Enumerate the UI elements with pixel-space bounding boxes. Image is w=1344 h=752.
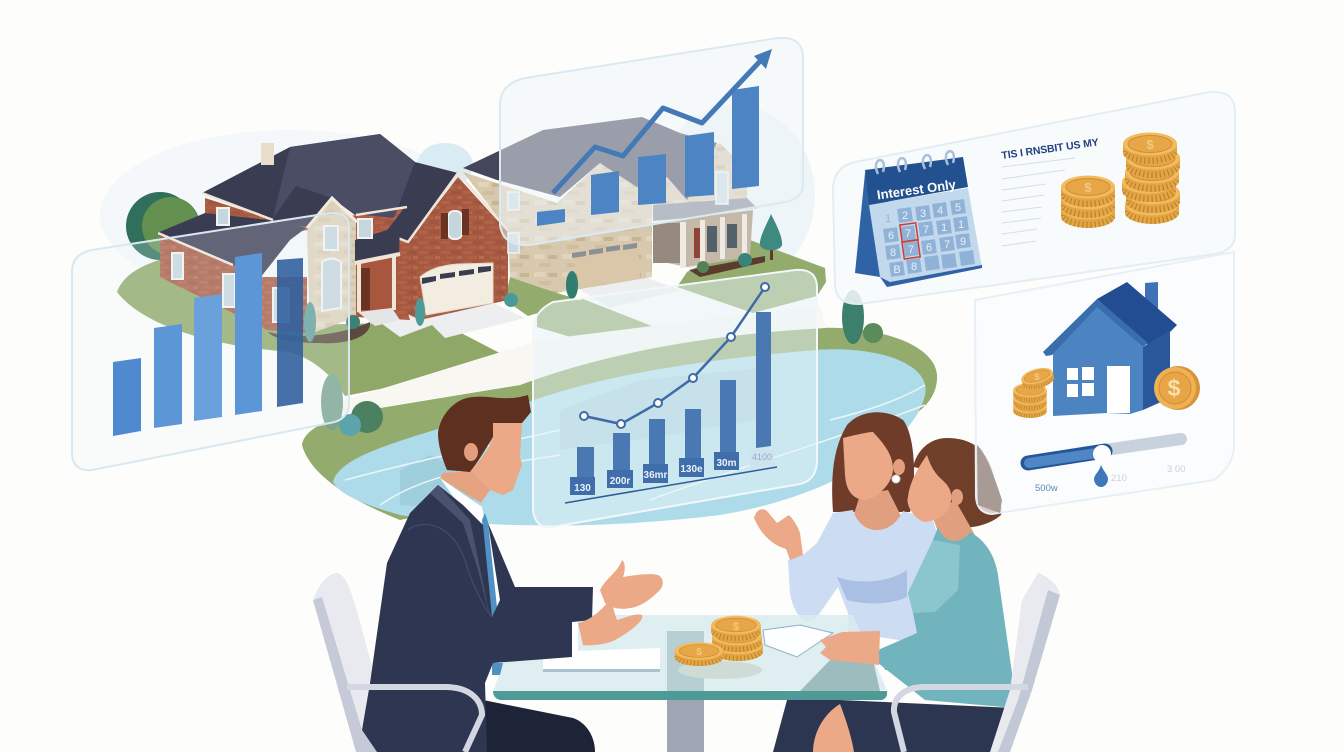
panel: interest only (833, 92, 1235, 304)
coins by house (1013, 365, 1056, 418)
roof highlight (273, 134, 415, 218)
slider labels (1035, 464, 1186, 494)
teal top (878, 527, 1014, 708)
roof side (1097, 282, 1177, 345)
calendar numbers: 7 (944, 239, 950, 251)
slider labels: 210 (1111, 473, 1127, 484)
garage door (572, 243, 640, 288)
garage door (420, 263, 493, 315)
garage windows (422, 266, 491, 284)
upper wall (205, 198, 410, 320)
big coin (1154, 366, 1200, 410)
coin stack: $ (733, 621, 739, 633)
calendar numbers: 9 (960, 236, 966, 248)
coin stack small: $ (1084, 180, 1092, 195)
right gable wall (385, 177, 508, 320)
calendar numbers: 8 (911, 261, 917, 273)
sitter reflection (800, 655, 880, 691)
panel: house and slider (975, 252, 1234, 514)
calendar numbers: 5 (955, 202, 961, 214)
person: woman right (878, 438, 1014, 708)
document (763, 625, 833, 657)
shrub: left tree (126, 192, 200, 260)
bar value labels: 200r (610, 476, 630, 487)
left wing wall (160, 235, 307, 333)
coin reflection (678, 661, 762, 679)
tree (760, 214, 782, 260)
bar chart (577, 312, 771, 479)
leg through glass (667, 631, 704, 694)
coins by house: $ (1034, 372, 1040, 382)
bar value labels: 4100 (752, 452, 772, 462)
person: woman left (754, 412, 945, 643)
trend arrow (553, 49, 772, 193)
left lawn (117, 252, 517, 396)
calendar base (880, 265, 982, 287)
chair: right (894, 573, 1060, 752)
calendar title: Interest Only (876, 176, 958, 203)
calendar rings (876, 151, 954, 174)
shrub: cone (566, 271, 578, 299)
highlighted dates (900, 223, 920, 259)
windows (1067, 367, 1094, 397)
side wall (463, 172, 557, 293)
calendar numbers: 7 (905, 228, 911, 240)
right lawns (505, 240, 826, 345)
teal chest panel (908, 540, 960, 613)
calendar numbers: 1 (885, 213, 891, 225)
front door (361, 268, 370, 310)
table leg (667, 631, 704, 752)
shrubs by pond (321, 290, 883, 436)
calendar (855, 151, 982, 287)
garage windows (572, 243, 637, 258)
pond (333, 349, 926, 526)
calendar numbers: 6 (926, 242, 932, 254)
upper hand (600, 560, 663, 609)
glass top (493, 615, 887, 692)
bar value labels: 130e (680, 464, 703, 475)
calendar numbers: 6 (888, 230, 894, 242)
bar chart (537, 86, 759, 226)
porch wall (653, 210, 753, 267)
face (470, 423, 522, 495)
stone tower (307, 198, 356, 334)
lone coin (675, 642, 723, 666)
porch windows (707, 224, 737, 252)
calendar numbers (885, 202, 966, 276)
skirts (773, 700, 1014, 752)
calendar header (865, 157, 968, 205)
bar chart (113, 253, 303, 436)
slider labels: 500w (1035, 483, 1058, 494)
panel: top chart (500, 38, 803, 245)
glass edge (493, 691, 887, 700)
face (843, 432, 893, 500)
chimney (261, 143, 274, 165)
centre wall (557, 163, 652, 293)
hands on table (820, 631, 880, 665)
paper (543, 648, 660, 672)
house: brick front house (157, 134, 510, 334)
teal forearm (878, 640, 950, 670)
calendar numbers: B (893, 264, 901, 276)
trend line (580, 283, 769, 428)
front door (694, 228, 700, 258)
face (907, 455, 951, 522)
shirt (440, 478, 497, 690)
right wall (652, 143, 747, 215)
front wall (1053, 305, 1143, 416)
calendar numbers: 8 (890, 247, 896, 259)
calendar numbers: 2 (902, 210, 908, 222)
ear (464, 443, 478, 461)
side windows (508, 172, 728, 253)
sweater (788, 510, 945, 643)
porch columns (680, 214, 747, 268)
lower wing roof (157, 213, 306, 278)
calendar numbers: 4 (937, 205, 943, 217)
porch (356, 242, 398, 317)
pond path (330, 305, 826, 415)
chair: left (313, 573, 378, 752)
roof edge (1043, 299, 1148, 356)
calendar cells (883, 199, 975, 277)
calendar numbers: 7 (908, 244, 914, 256)
shirt cuff (572, 622, 578, 656)
calendar back (855, 173, 890, 277)
coin stack tall (1122, 132, 1180, 224)
house icon (1043, 282, 1177, 416)
calendar numbers: 7 (923, 224, 929, 236)
panel: center chart (533, 270, 817, 527)
chimney (1145, 282, 1158, 314)
lower hand (578, 600, 642, 645)
person: man (362, 395, 663, 752)
porch steps (358, 308, 400, 326)
main roof (202, 134, 458, 242)
hair (832, 412, 914, 512)
door (1107, 366, 1130, 413)
pond shore (302, 328, 937, 520)
bar value labels: 30m (716, 458, 737, 469)
ear (951, 489, 963, 505)
tie lower (492, 663, 503, 675)
gable trim (158, 173, 510, 265)
house: stone house (463, 117, 782, 299)
calendar numbers: 1 (958, 219, 964, 231)
coin stack tall: $ (1146, 137, 1154, 152)
raised hand (754, 509, 803, 560)
panel: left chart (72, 213, 349, 470)
windows (172, 208, 462, 322)
window shutters (441, 209, 469, 239)
axis (565, 467, 777, 503)
driveways (370, 276, 680, 338)
calendar body (869, 188, 982, 287)
foundation bed with shrubs (268, 293, 518, 343)
neck (932, 500, 975, 545)
bar value labels: 130 (574, 483, 591, 494)
roof (463, 117, 717, 200)
calendar numbers: 1 (941, 222, 947, 234)
shrub: porch bushes (689, 253, 765, 277)
ear (893, 459, 905, 475)
hair seen through panel (977, 445, 1002, 513)
jacket lapel (430, 485, 490, 617)
side wall (1143, 330, 1170, 410)
hair (438, 395, 531, 472)
jacket (362, 485, 593, 752)
table (493, 615, 950, 752)
hair (913, 438, 1001, 527)
lone coin: $ (696, 647, 702, 658)
big coin: $ (1168, 375, 1181, 401)
neck (853, 490, 903, 532)
text lines (1002, 158, 1075, 246)
slider labels: 3 00 (1167, 464, 1186, 475)
panel heading: TIS I RNSBIT US MY (1001, 136, 1099, 162)
pale background blobs (100, 105, 815, 300)
calendar numbers: 3 (920, 208, 926, 220)
sweater band (837, 570, 907, 603)
bar value labels (570, 450, 774, 495)
porch roof (653, 198, 757, 221)
coin stack small (1061, 176, 1115, 228)
trousers (473, 700, 595, 752)
neck (440, 470, 490, 503)
slider (1028, 439, 1181, 487)
tie (482, 513, 498, 617)
bar value labels: 36mr (644, 470, 668, 481)
chair arm: left (347, 687, 482, 752)
coin stack (711, 616, 763, 661)
earring (892, 475, 900, 483)
drop marker (1094, 465, 1108, 487)
jacket seam (408, 524, 492, 617)
